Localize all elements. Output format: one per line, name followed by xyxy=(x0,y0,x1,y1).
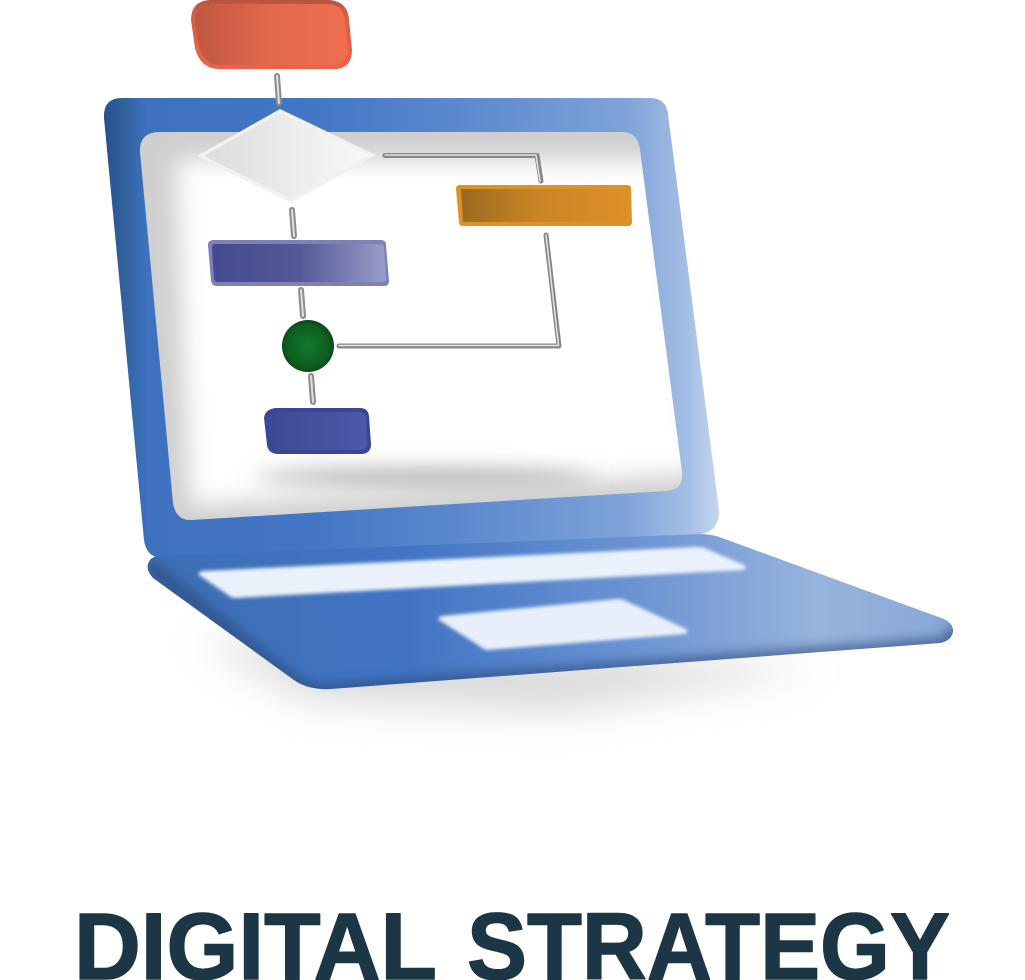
connector: decision to orange box xyxy=(385,156,541,181)
screen highlight xyxy=(176,160,700,505)
connector: orange box to node xyxy=(339,235,559,346)
trackpad xyxy=(438,599,688,650)
purple process box xyxy=(208,240,389,286)
green node xyxy=(282,320,334,372)
laptop lid xyxy=(104,98,719,558)
laptop base xyxy=(140,530,960,695)
laptop screen xyxy=(130,125,700,525)
laptop ground shadow xyxy=(200,640,820,712)
decision diamond xyxy=(197,109,376,203)
connector: process to node xyxy=(301,290,303,316)
flowchart drop shadow xyxy=(255,469,595,485)
connector: decision to process xyxy=(292,210,294,236)
connector: node to end xyxy=(311,376,313,402)
connector: start to decision xyxy=(277,76,279,103)
orange process box xyxy=(456,185,632,226)
flowchart xyxy=(191,0,632,454)
keyboard panel xyxy=(198,547,746,598)
end box xyxy=(264,408,371,454)
title xyxy=(74,894,950,980)
base edge shading xyxy=(148,566,956,691)
laptop illustration xyxy=(104,98,960,712)
start box xyxy=(191,0,352,69)
